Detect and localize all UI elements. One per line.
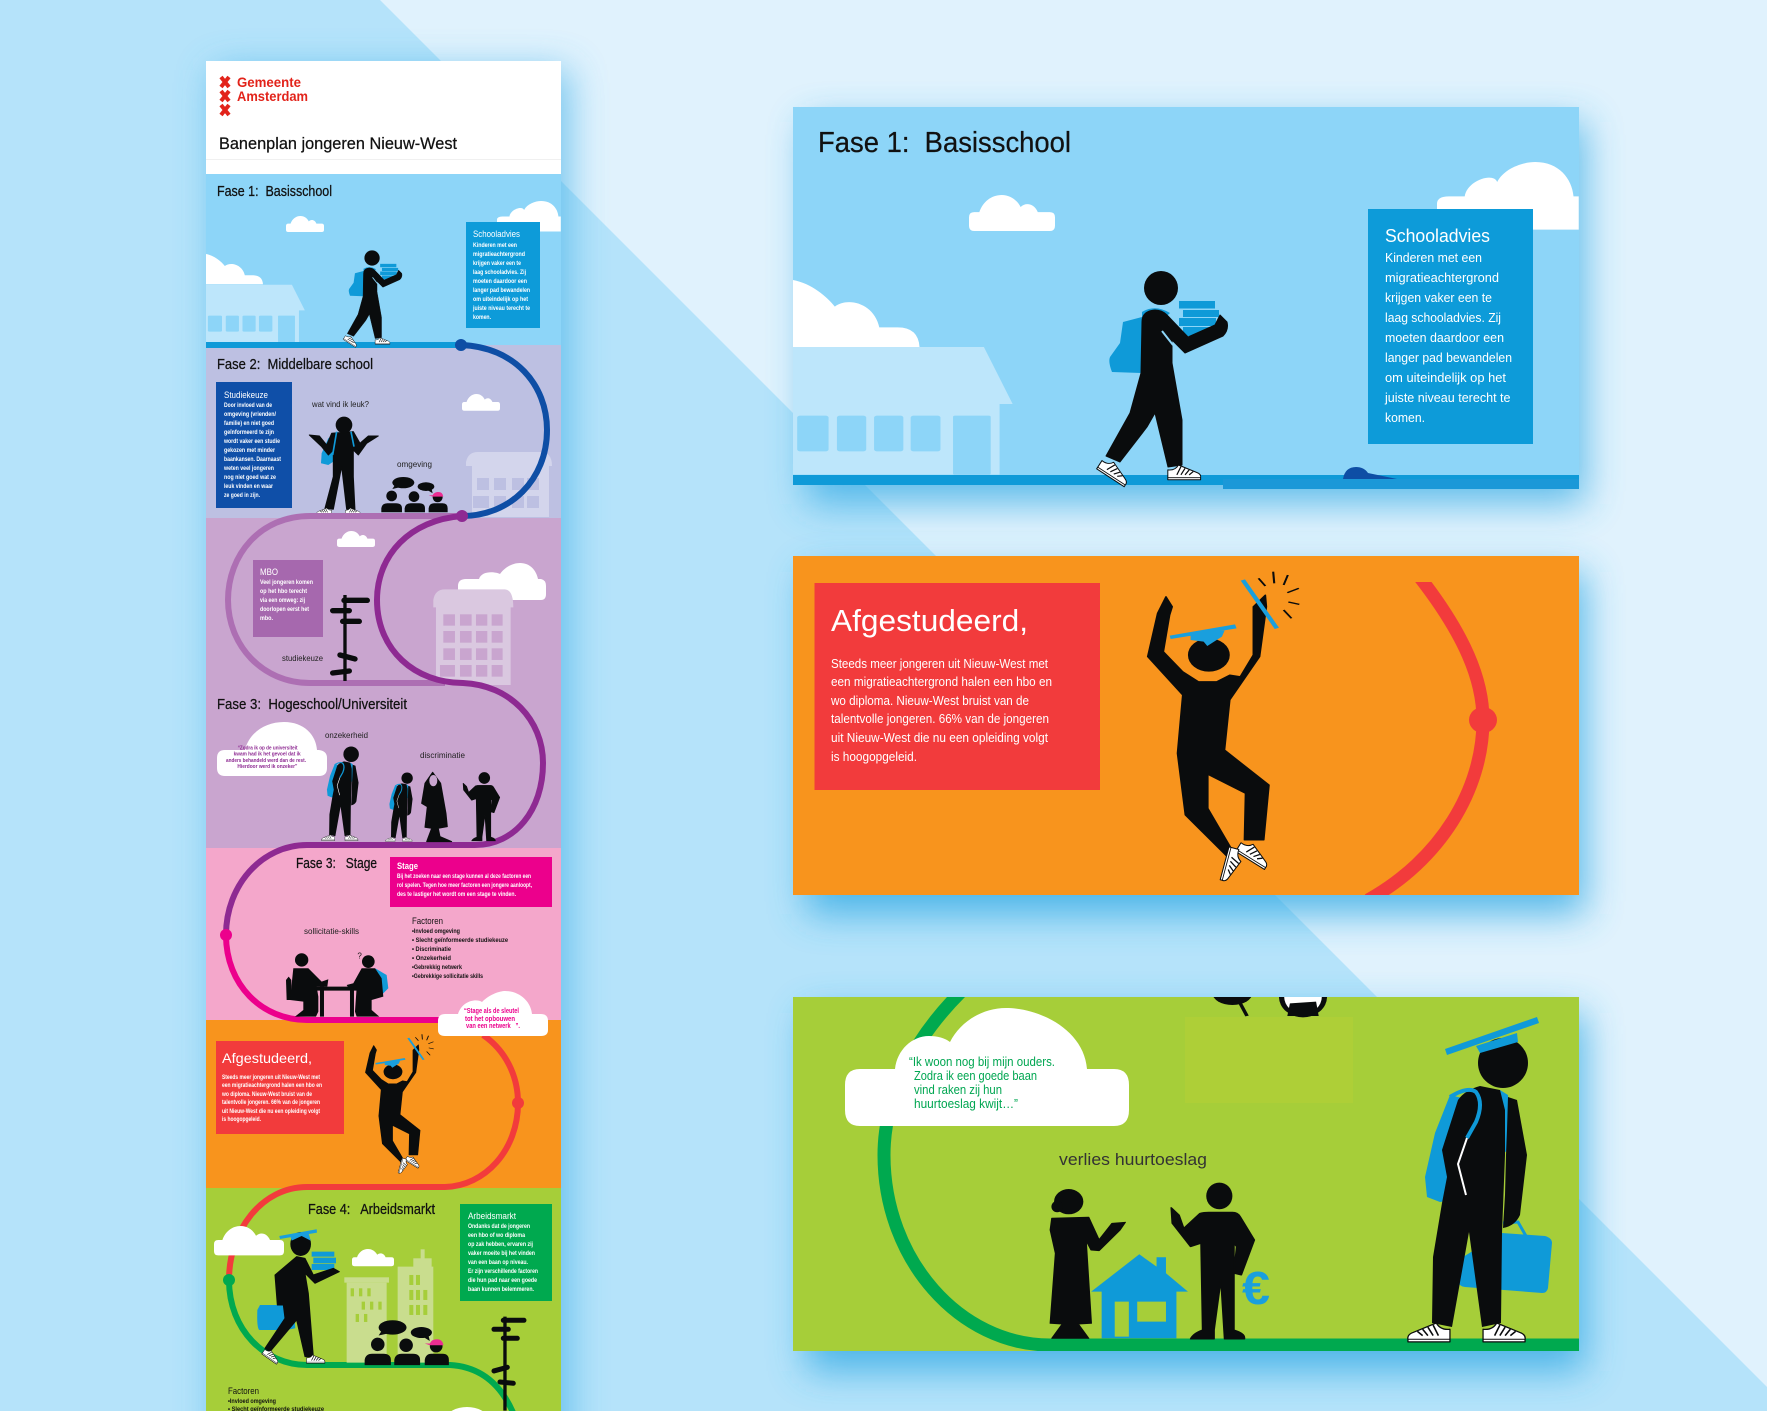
- city buildings: [344, 1249, 433, 1363]
- list: Factoren stage: • Slecht geïnformeerde studiekeuze: [412, 938, 509, 944]
- list: Factoren arbeidsmarkt: Factoren: [228, 1386, 259, 1397]
- figure: man: [1171, 1183, 1254, 1339]
- figure: jumping graduate: [1148, 572, 1299, 884]
- label: discriminatie: discriminatie: [420, 750, 465, 760]
- figure: jumping graduate: [365, 1034, 434, 1175]
- quote cloud: huurtoeslag: “Ik woon nog bij mijn ouders.: [909, 1055, 1055, 1069]
- callout: Afgestudeerd: talentvolle jongeren. 66% van de jongeren: [831, 711, 1049, 726]
- quote cloud: universiteit: Hierdoor werd ik onzeker”: [237, 764, 298, 770]
- quote cloud: stage: [438, 991, 548, 1036]
- label: studiekeuze: studiekeuze: [282, 653, 323, 663]
- figure: younger student: [386, 772, 413, 841]
- callout: Arbeidsmarkt: die hun pad naar een goede: [468, 1278, 538, 1284]
- callout: Arbeidsmarkt: Er zijn verschillende factoren: [468, 1269, 538, 1275]
- callout: Studiekeuze: Door invloed van de: [224, 403, 273, 409]
- callout: Arbeidsmarkt: Ondanks dat de jongeren: [468, 1224, 530, 1230]
- panel: Fase 1 detail: [793, 107, 1579, 489]
- list: Factoren stage: •Invloed omgeving: [412, 929, 460, 935]
- callout: Schooladvies: komen.: [473, 315, 491, 321]
- callout: Arbeidsmarkt: [460, 1204, 552, 1301]
- quote cloud: universiteit: anders behandeld werd dan de rest.: [226, 758, 306, 764]
- quote cloud: huurtoeslag: [845, 1008, 1129, 1126]
- callout: MBO: [253, 560, 323, 637]
- callout: Studiekeuze: geïnformeerd te zijn: [224, 430, 274, 436]
- quote cloud: stage: van een netwerk ”.: [466, 1023, 520, 1030]
- callout: Studiekeuze: nog niet goed wat ze: [224, 475, 277, 481]
- icon: crowd talking: [381, 477, 448, 512]
- list: Factoren stage: • Discriminatie: [412, 947, 452, 953]
- callout: Arbeidsmarkt: vaker moeite bij het vinden: [468, 1251, 535, 1257]
- logo: Gemeente Amsterdam: [221, 75, 308, 115]
- panel: long infographic overview: [206, 61, 561, 1411]
- list: Factoren stage: [412, 916, 509, 980]
- quote cloud: huurtoeslag: huurtoeslag kwijt…”: [914, 1097, 1018, 1111]
- section backgrounds: [206, 174, 561, 1411]
- callout: Arbeidsmarkt: baan kunnen belemmeren.: [468, 1287, 534, 1293]
- panel: huurtoeslag detail: [793, 976, 1579, 1351]
- list: Factoren stage: •Gebrekkig netwerk: [412, 965, 463, 971]
- heading: Fase 3 Stage: Fase 3: Stage: [296, 856, 377, 872]
- quote cloud: stage: “Stage als de sleutel: [464, 1008, 519, 1015]
- quote cloud: universiteit: “Zodra ik op de universiteit: [238, 745, 298, 751]
- cropped crowd at top edge: [1213, 976, 1327, 1017]
- callout: Schooladvies: juiste niveau terecht te: [1384, 390, 1510, 405]
- list: Factoren stage: • Onzekerheid: [412, 956, 451, 962]
- list: Factoren arbeidsmarkt: •Invloed omgeving: [228, 1399, 276, 1405]
- callout: Schooladvies: Schooladvies: [473, 229, 520, 239]
- list: Factoren stage: Factoren: [412, 916, 443, 927]
- figure: job interview: ?: [357, 951, 362, 960]
- icon: crowd talking, Fase 4: [365, 1320, 449, 1365]
- school building: [206, 285, 305, 342]
- callout: Studiekeuze: wordt vaker een studie: [223, 439, 281, 445]
- callout: MBO: via een omweg: zij: [260, 598, 305, 604]
- callout: MBO: Veel jongeren komen: [260, 580, 313, 586]
- callout: Schooladvies: langer pad bewandelen: [1385, 350, 1512, 365]
- figure: shrugging student: [309, 417, 378, 514]
- callout: Afgestudeerd: wo diploma. Nieuw-West bruist van de: [830, 693, 1029, 708]
- callout: Afgestudeerd: [814, 583, 1100, 790]
- callout: Stage: des te lastiger het wordt om een stage te vinden.: [397, 892, 516, 898]
- figure: man gesturing: [463, 772, 500, 841]
- icon: signpost, Fase 4: [494, 1317, 524, 1411]
- callout: Studiekeuze: familie) en niet goed: [224, 421, 274, 427]
- figure: job interview: [286, 951, 388, 1017]
- callout: Afgestudeerd small: wo diploma. Nieuw-West bruist van de: [221, 1092, 313, 1098]
- callout: Stage: Stage: [397, 861, 418, 871]
- heading: Fase 1: Fase 1: Basisschool: [217, 184, 332, 200]
- callout: Afgestudeerd: uit Nieuw-West die nu een opleiding volgt: [831, 730, 1048, 745]
- label: verlies huurtoeslag: verlies huurtoeslag: [1059, 1150, 1207, 1169]
- callout: Schooladvies: moeten daardoor een: [473, 279, 527, 285]
- callout: Stage: [390, 857, 552, 907]
- callout: Studiekeuze: omgeving (vrienden/: [224, 412, 276, 418]
- apartment building: [433, 589, 513, 685]
- cloud: behind apartment: [458, 563, 546, 600]
- icon: signpost: [333, 595, 367, 681]
- heading: Fase 2: Fase 2: Middelbare school: [217, 357, 373, 373]
- callout: MBO: doorlopen eerst het: [260, 607, 309, 613]
- callout: Afgestudeerd: Afgestudeerd,: [831, 603, 1028, 638]
- callout: Schooladvies: krijgen vaker een te: [1385, 290, 1492, 305]
- clouds: Fase 4: [214, 1226, 487, 1411]
- callout: Afgestudeerd: is hoogopgeleid.: [831, 749, 917, 764]
- label: onzekerheid: onzekerheid: [325, 730, 368, 740]
- callout: Afgestudeerd: een migratieachtergrond halen een hbo en: [831, 674, 1052, 689]
- clouds: Fase 1: [206, 201, 561, 284]
- road: [884, 985, 1579, 1345]
- figure: woman: [1050, 1189, 1125, 1338]
- clouds: [793, 162, 1579, 347]
- callout: Afgestudeerd: Steeds meer jongeren uit Nieuw-West met: [831, 656, 1048, 671]
- road: Fase 1: [206, 342, 461, 348]
- callout: Arbeidsmarkt: een hbo of wo diploma: [468, 1233, 526, 1239]
- road: winding path through the phases: [220, 339, 547, 1411]
- callout: Arbeidsmarkt: van een baan op niveau.: [468, 1260, 528, 1266]
- school building: [793, 347, 1013, 475]
- road arc with node: [1368, 575, 1497, 900]
- label: omgeving: omgeving: [397, 459, 432, 469]
- quote cloud: huurtoeslag: Zodra ik een goede baan: [914, 1069, 1037, 1083]
- callout: Studiekeuze: [216, 382, 292, 508]
- title: Banenplan jongeren Nieuw-West: [219, 134, 457, 153]
- quote cloud: universiteit: [217, 722, 327, 776]
- heading: Fase 4: Fase 4: Arbeidsmarkt: [308, 1202, 435, 1218]
- figure: graduate with bag: [1408, 1017, 1552, 1342]
- callout: Studiekeuze: ze goed in zijn.: [224, 493, 260, 499]
- callout: Schooladvies: Kinderen met een: [1385, 250, 1482, 265]
- callout: Stage: rol spelen. Tegen hoe meer factoren een jongere aanloopt,: [397, 883, 532, 889]
- callout: Schooladvies: Schooladvies: [1385, 225, 1490, 246]
- callout: Schooladvies: om uiteindelijk op het: [473, 297, 528, 303]
- cloud: Fase 2: [462, 394, 500, 411]
- callout: Arbeidsmarkt: Arbeidsmarkt: [468, 1211, 516, 1221]
- icon: euro sign: €: [1242, 1262, 1270, 1314]
- callout: Studiekeuze: leuk vinden en waar: [224, 484, 274, 490]
- callout: Schooladvies: om uiteindelijk op het: [1385, 370, 1506, 385]
- callout: Schooladvies: laag schooladvies. Zij: [473, 270, 526, 276]
- callout: Schooladvies: juiste niveau terecht te: [472, 306, 531, 312]
- panel: Afgestudeerd detail: [793, 556, 1579, 900]
- cloud: MBO: [337, 531, 375, 547]
- figure: insecure student: [322, 746, 359, 841]
- callout: Schooladvies: migratieachtergrond: [1385, 270, 1499, 285]
- callout: Schooladvies: laag schooladvies. Zij: [1385, 310, 1501, 325]
- building: Fase 2: [466, 452, 552, 517]
- callout: Afgestudeerd small: talentvolle jongeren. 66% van de jongeren: [222, 1100, 320, 1106]
- figure: student walking with books: [343, 250, 402, 347]
- callout: Afgestudeerd small: [216, 1041, 344, 1134]
- callout: Afgestudeerd small: is hoogopgeleid.: [222, 1117, 261, 1123]
- label: wat vind ik leuk: wat vind ik leuk?: [311, 399, 369, 409]
- callout: Schooladvies: Kinderen met een: [473, 243, 517, 249]
- callout: Afgestudeerd small: uit Nieuw-West die nu een opleiding volgt: [222, 1109, 320, 1115]
- heading: Fase 3 Hogeschool: Fase 3: Hogeschool/Universiteit: [217, 697, 407, 713]
- callout: Afgestudeerd small: Afgestudeerd,: [222, 1050, 312, 1066]
- figure: woman in hijab: [422, 772, 452, 842]
- road with bend: [793, 467, 1579, 489]
- figure: graduate with books and bag: [257, 1229, 339, 1364]
- list: Factoren arbeidsmarkt: [228, 1386, 325, 1411]
- callout: Stage: Bij het zoeken naar een stage kunnen al deze factoren een: [397, 874, 531, 880]
- heading: Fase 1 Basisschool: Fase 1: Basisschool: [818, 127, 1071, 159]
- callout: Studiekeuze: gekozen met minder: [224, 448, 276, 454]
- callout: MBO: mbo.: [260, 616, 273, 622]
- callout: MBO: MBO: [260, 567, 278, 577]
- callout: Schooladvies: langer pad bewandelen: [473, 288, 530, 294]
- callout: Schooladvies: migratieachtergrond: [473, 252, 525, 258]
- callout: Schooladvies: komen.: [1385, 410, 1425, 425]
- callout: Studiekeuze: Studiekeuze: [224, 390, 268, 400]
- figure: student walking with books: [1097, 271, 1228, 487]
- logo: Gemeente Amsterdam: Gemeente: [237, 75, 301, 90]
- quote cloud: stage: tot het opbouwen: [465, 1016, 515, 1023]
- list: Factoren stage: •Gebrekkige sollicitatie skills: [412, 974, 484, 980]
- callout: Afgestudeerd small: Steeds meer jongeren uit Nieuw-West met: [222, 1075, 320, 1081]
- logo: Gemeente Amsterdam: Amsterdam: [237, 89, 308, 104]
- callout: Arbeidsmarkt: op zak hebben, ervaren zij: [468, 1242, 533, 1248]
- callout: Schooladvies: krijgen vaker een te: [473, 261, 522, 267]
- quote cloud: huurtoeslag: vind raken zij hun: [914, 1083, 1002, 1097]
- callout: Schooladvies: moeten daardoor een: [1385, 330, 1504, 345]
- icon: house: [1091, 1254, 1188, 1338]
- callout: Studiekeuze: baankansen. Daarnaast: [224, 457, 281, 463]
- callout: Studiekeuze: weten veel jongeren: [223, 466, 274, 472]
- quote cloud: universiteit: kwam had ik het gevoel dat ik: [234, 752, 301, 758]
- callout: Schooladvies: [1368, 209, 1533, 444]
- label: sollicitatie-skills: sollicitatie-skills: [304, 926, 359, 936]
- callout: Schooladvies: [466, 222, 540, 328]
- callout: Afgestudeerd small: een migratieachtergrond halen een hbo en: [222, 1083, 322, 1089]
- header panel: [206, 61, 561, 174]
- callout: MBO: op het hbo terecht: [260, 589, 307, 595]
